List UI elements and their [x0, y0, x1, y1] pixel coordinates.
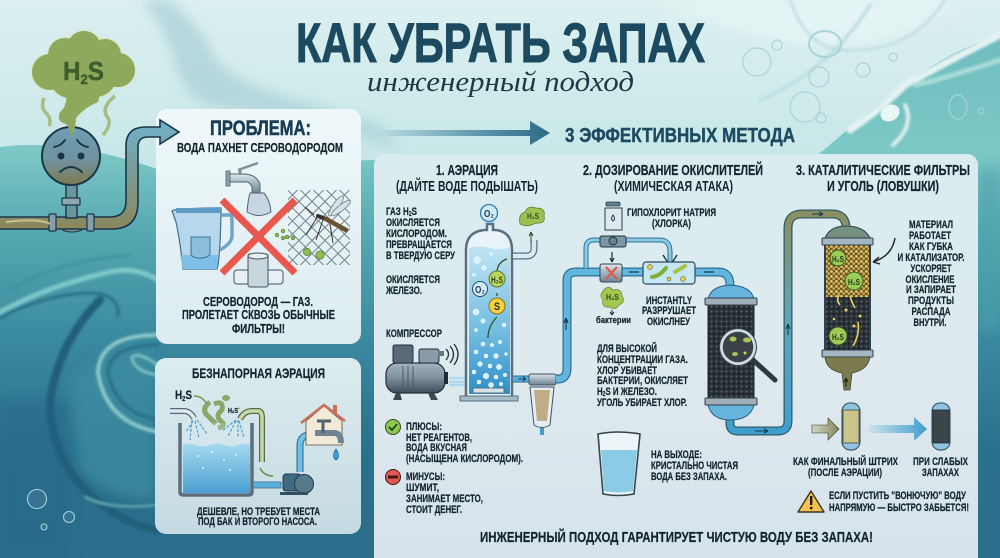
heading: method 1: (ДАЙТЕ ВОДЕ ПОДЫШАТЬ) [396, 177, 538, 195]
heading: method 1 [396, 162, 538, 195]
icon: pipe with smelly gas: S [88, 56, 104, 86]
text: material note: КАК ГУБКА [909, 241, 953, 253]
label: hypochlorite: (ХЛОРКА) [652, 218, 691, 230]
icon: pipe with smelly gas: 2 [81, 71, 88, 87]
text: pros: (НАСЫЩЕНА КИСЛОРОДОМ). [406, 453, 523, 465]
text: warning [829, 490, 969, 514]
label: final touch: КАК ФИНАЛЬНЫЙ ШТРИХ [793, 455, 898, 468]
label: small h2s: H₂S [228, 406, 238, 415]
icon: gas molecules [275, 229, 324, 259]
text: pros: НЕТ РЕАГЕНТОВ, [406, 432, 472, 444]
text: material note: РАСПАДА [912, 306, 951, 318]
text: oxidation notes: КИСЛОРОДОМ. [386, 228, 447, 240]
panel: non-pressure aeration [155, 358, 361, 534]
neck and couplings [66, 183, 77, 218]
title: КАК УБРАТЬ ЗАПАХ [296, 11, 705, 74]
label: h2s: 2 [182, 396, 185, 403]
bubbles [472, 252, 508, 388]
circle: H2S in column [489, 271, 505, 287]
label: final touch [793, 455, 898, 479]
text: material note: РАБОТАЕТ [909, 230, 951, 242]
icon: h2s blob and bacteria label: H₂S [606, 292, 619, 302]
text: output: ВОДА БЕЗ ЗАПАХА. [651, 471, 727, 483]
sad face [42, 127, 100, 185]
curved arrows in column [488, 259, 507, 338]
arrow: to vessel [873, 238, 895, 264]
icon: cons [386, 470, 400, 484]
text: aeration note: ДЕШЕВЛЕ, НО ТРЕБУЕТ МЕСТА [197, 506, 320, 518]
text: gas explanation: ФИЛЬТРЫ! [232, 322, 285, 336]
left pipe [0, 120, 179, 229]
icon: catalytic vessel: H₂S [832, 332, 844, 342]
icon: catalytic vessel: H₂S [832, 254, 844, 264]
label: weak odours [913, 456, 968, 479]
diagram: aeration column: S [494, 301, 500, 313]
panel: problem [156, 109, 361, 344]
diagram: aeration column: O₂ [484, 209, 494, 220]
icon: catalytic vessel: H₂S [848, 277, 860, 287]
diagram: spray inlets [170, 411, 273, 476]
text: high concentration note [597, 342, 688, 409]
diagram: gas outlet: H₂S [527, 211, 539, 221]
text: instantly destroys [642, 295, 696, 328]
label: final touch: (ПОСЛЕ АЭРАЦИИ) [808, 467, 882, 479]
text: high concentration note: УГОЛЬ УБИРАЕТ ХЛОР. [597, 397, 687, 409]
text: material note: И ЗАПИРАЕТ [906, 284, 956, 296]
icon: warning [798, 491, 824, 512]
text: gas explanation: СЕРОВОДОРОД — ГАЗ. [203, 295, 313, 309]
h2s cloud [31, 30, 136, 99]
text: instantly destroys: РАЗРРУШАЕТ [642, 305, 696, 317]
icon: carbon vessel with magnifier [705, 285, 775, 420]
circle: sulfur [489, 298, 505, 314]
text: high concentration note: ДЛЯ ВЫСОКОЙ [597, 342, 657, 355]
text: cons: ЗАНИМАЕТ МЕСТО, [406, 493, 483, 505]
icon: valve with cross [600, 264, 622, 282]
diagram: gas outlet [513, 207, 544, 256]
text: oxidation notes: ОКИСЛЯЕТСЯ [386, 274, 440, 286]
label: hypochlorite [627, 207, 716, 230]
text: oxidation notes: ГАЗ H [386, 206, 417, 218]
label: h2s: S [185, 388, 192, 402]
label: weak odours: ПРИ СЛАБЫХ [913, 456, 968, 468]
icon: faucet with shower head [226, 163, 271, 216]
icon: mixer with bacteria [643, 262, 695, 284]
icon: small catalytic filter [842, 403, 860, 450]
text: instantly destroys: ОКИСЛНЕУ [647, 316, 690, 328]
icon: mosquito [305, 194, 352, 243]
text: material note: МАТЕРИАЛ [909, 219, 953, 231]
diagram: tank [180, 423, 252, 495]
icon: small carbon filter [932, 403, 950, 450]
text: material note: ОКИСЛЕНИЕ [906, 274, 954, 286]
heading: method 2: (ХИМИЧЕСКАЯ АТАКА) [614, 178, 733, 195]
icon: pros [386, 420, 400, 434]
heading: aeration: БЕЗНАПОРНАЯ АЭРАЦИЯ [192, 366, 325, 381]
heading: method 3: И УГОЛЬ (ЛОВУШКИ) [827, 178, 939, 195]
text: pros: ПЛЮСЫ: [406, 421, 442, 433]
circle: O2 in column [472, 282, 488, 296]
text: high concentration note: 2 [603, 391, 606, 398]
label: weak odours: ЗАПАХАХ [922, 467, 959, 479]
text: oxidation notes: ЖЕЛЕЗО. [385, 285, 422, 297]
icon: red cross [222, 200, 295, 273]
text: cons: СТОИТ ДЕНЕГ. [406, 504, 462, 516]
heading: method 3 [796, 162, 970, 195]
text: high concentration note: БАКТЕРИИ, ОКИСЛЯЕТ [597, 375, 688, 387]
arrow: blue [868, 417, 927, 441]
text: material note: ВНУТРИ. [914, 317, 946, 329]
diagram: riser pipe [730, 212, 846, 433]
diagram: aeration column [460, 204, 518, 401]
icon: smell vapour [194, 395, 240, 428]
text: material note: И КАТАЛИЗАТОР. [898, 252, 964, 264]
text: material note: ПРОДУКТЫ [908, 295, 954, 307]
heading: method 2: 2. ДОЗИРОВАНИЕ ОКИСЛИТЕЛЕЙ [583, 161, 763, 179]
text: oxidation notes: В ТВЕРДУЮ СЕРУ [386, 250, 455, 262]
text: pros: ВОДА ВКУСНАЯ [406, 442, 467, 454]
text: aeration note [197, 506, 320, 528]
text: instantly destroys: ИНСТАНТLY [646, 295, 692, 307]
text: oxidation notes: ПРЕВРАЩАЕТСЯ [386, 239, 452, 251]
text: cons: ШУМИТ, [406, 482, 439, 494]
label: compressor: КОМПРЕССОР [386, 328, 442, 340]
icon: pipe with smelly gas: H [63, 56, 82, 86]
text: material note [898, 219, 964, 329]
heading: problem: ПРОБЛЕМА: [210, 117, 311, 140]
text: output [651, 449, 738, 483]
icon: catalytic vessel [822, 226, 873, 390]
diagram: aeration column: H₂S [491, 275, 503, 285]
text: oxidation notes: S [412, 206, 417, 218]
text: cons [406, 471, 483, 516]
icon: compressor [386, 344, 480, 400]
icon: h2s blob and bacteria label [596, 287, 631, 325]
text: cons: МИНУСЫ: [406, 471, 445, 483]
text: oxidation notes: 2 [409, 211, 412, 218]
label: hypochlorite: ГИПОХЛОРИТ НАТРИЯ [627, 207, 716, 219]
diagram: pre-filter [513, 374, 556, 435]
diagram: pump and pipe [253, 435, 325, 495]
text: high concentration note: S И ЖЕЛЕЗО. [605, 386, 657, 398]
subheading: water smell: ВОДА ПАХНЕТ СЕРОВОДОРОДОМ [177, 140, 343, 155]
icon: glass of water [598, 432, 640, 496]
icon: house with tap [301, 405, 345, 460]
text: gas explanation: ПРОЛЕТАЕТ СКВОЗЬ ОБЫЧНЫЕ [182, 308, 335, 322]
arrow: olive [812, 418, 839, 440]
label: h2s: H [175, 388, 184, 402]
icon: h2s blob and bacteria label: бактерии [596, 315, 631, 325]
text: material note: УСКОРЯЕТ [910, 263, 952, 275]
arrow: to methods [380, 121, 550, 145]
heading: three methods: 3 ЭФФЕКТИВНЫХ МЕТОДА [565, 125, 795, 147]
text: high concentration note: ХЛОР УБИВАЕТ [597, 365, 657, 377]
icon: pipe with smelly gas [0, 30, 179, 232]
text: aeration note: ПОД БАК И ВТОРОГО НАСОСА. [198, 516, 317, 528]
icon: chain-link mesh [288, 190, 350, 265]
text: high concentration note: H [597, 386, 605, 398]
diagram: piping from filter to carbon vessel [556, 240, 730, 379]
diagram: aeration column: O₂ [475, 285, 485, 296]
icon: cartridge filter [234, 253, 283, 287]
text: oxidation notes [385, 206, 455, 297]
circle: O2 top [480, 204, 498, 222]
text: output: НА ВЫХОДЕ: [651, 449, 702, 461]
text: gas explanation [182, 295, 335, 336]
text: high concentration note: КОНЦЕНТРАЦИИ ГАЗА. [597, 354, 688, 366]
subtitle: инженерный подход [367, 66, 634, 98]
panel: methods [374, 154, 978, 558]
text: output: КРИСТАЛЬНО ЧИСТАЯ [651, 460, 738, 472]
icon: water pitcher [172, 208, 232, 269]
text: pros [406, 421, 523, 465]
text: oxidation notes: ОКИСЛЯЕТСЯ [386, 217, 440, 229]
icon: dosing bottle and pump [600, 202, 626, 262]
heading: method 2 [583, 161, 763, 195]
heading: method 1: 1. АЭРАЦИЯ [436, 162, 498, 179]
footer statement: ИНЖЕНЕРНЫЙ ПОДХОД ГАРАНТИРУЕТ ЧИСТУЮ ВОДУ БЕЗ ЗАПАХА! [480, 528, 873, 546]
